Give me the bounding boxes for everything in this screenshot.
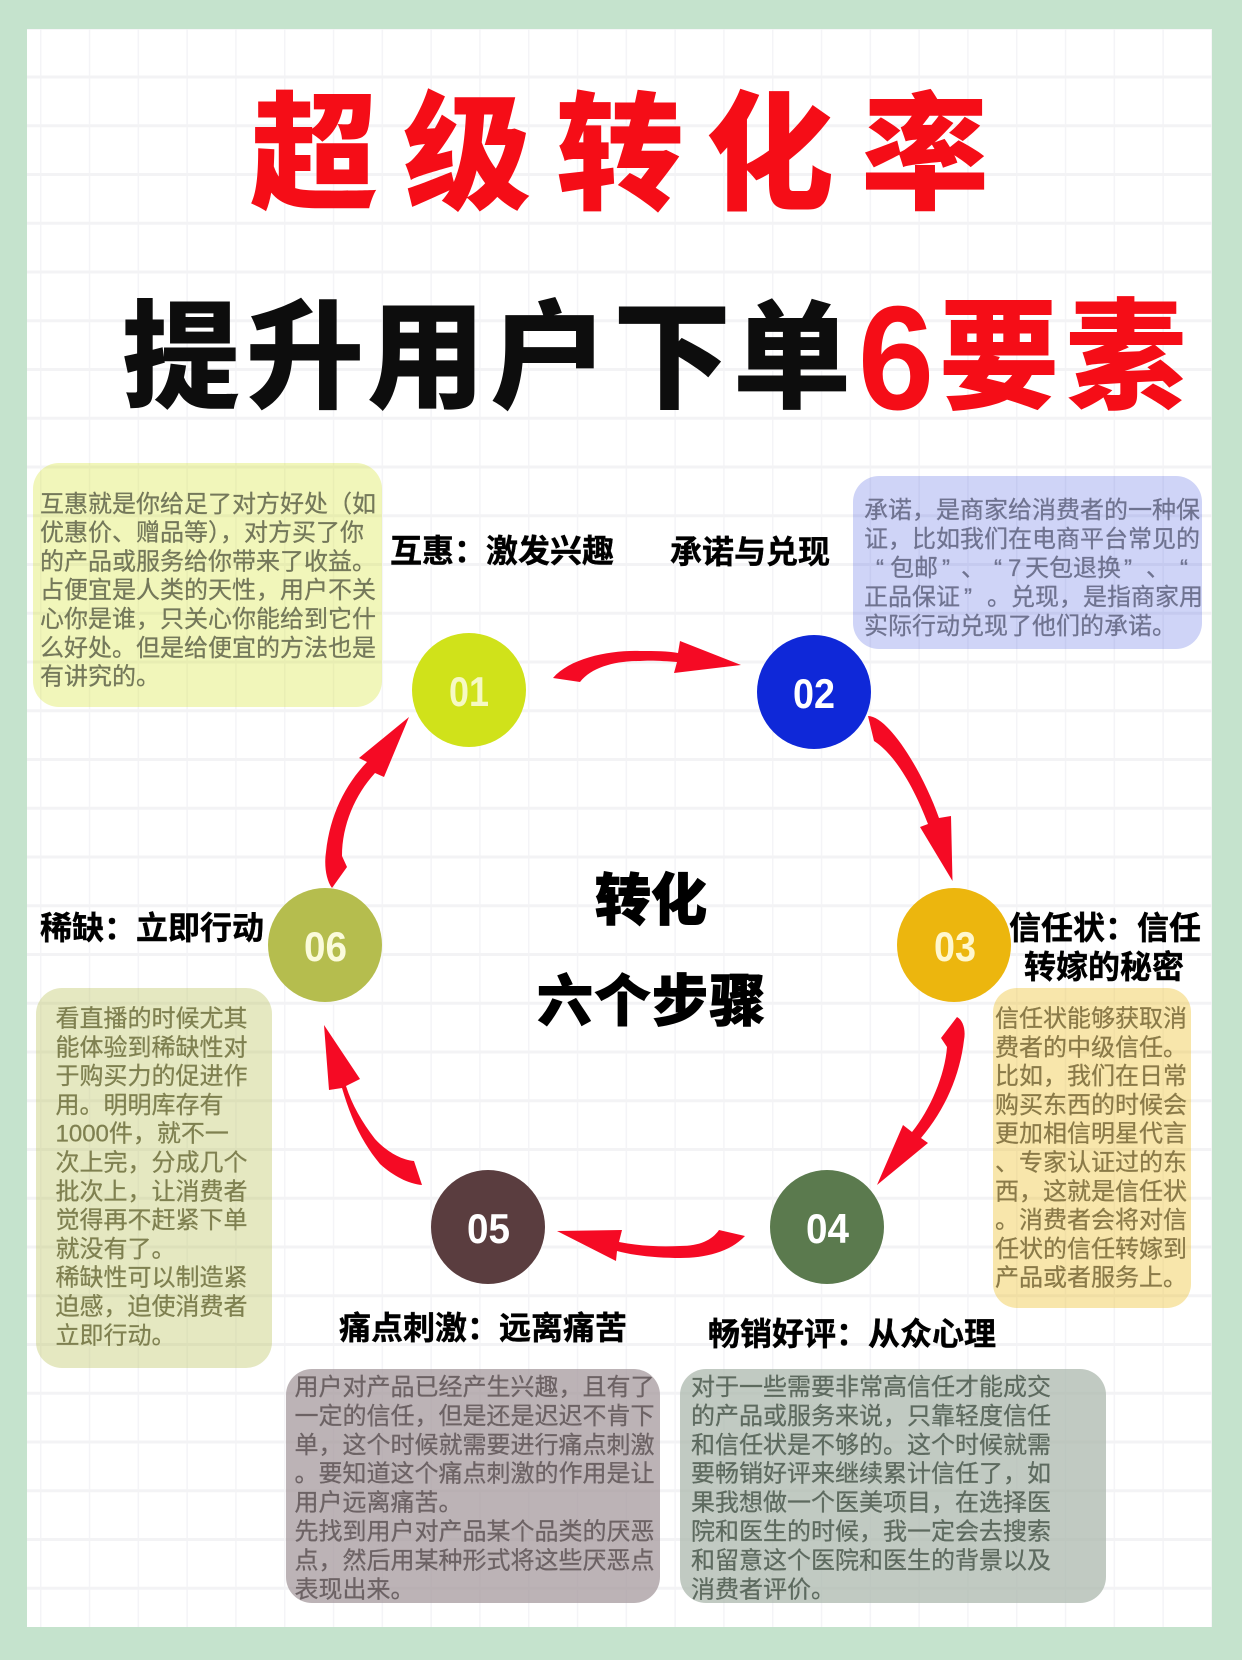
panel: 信任状 description: 购买东西的时候会 <box>995 1092 1187 1119</box>
panel: 痛点刺激 description: 表现出来。 <box>294 1576 414 1603</box>
panel: 痛点刺激 description: 用户远离痛苦。 <box>294 1490 462 1517</box>
panel: 承诺与兑现 description: 实际行动兑现了他们的承诺。 <box>864 613 1176 640</box>
arrow: 06 to 01 <box>325 717 409 888</box>
step circle 06 <box>268 888 382 1002</box>
panel: 稀缺 description: 于购买力的促进作 <box>56 1063 248 1090</box>
panel: 稀缺 description: 就没有了。 <box>56 1236 176 1263</box>
panel: 互惠 description: 有讲究的。 <box>40 664 160 691</box>
panel: 畅销好评 description: 院和医生的时候，我一定会去搜索 <box>691 1518 1051 1546</box>
panel: 畅销好评 description: 对于一些需要非常高信任才能成交 <box>691 1374 1051 1401</box>
panel: 互惠 description: 占便宜是人类的天性，用户不关 <box>40 577 376 604</box>
panel: 稀缺 description: 1000件，就不一 <box>56 1121 229 1148</box>
panel: 畅销好评 description: 消费者评价。 <box>691 1576 835 1603</box>
panel: 互惠 description <box>33 463 382 707</box>
panel: 承诺与兑现 description: 证，比如我们在电商平台常见的 <box>864 526 1200 553</box>
step circle 02 <box>757 635 871 749</box>
subtitle: 提升用户下单6要素: 要素 <box>939 291 1186 425</box>
step circle 03: 03 <box>934 923 976 970</box>
panel: 痛点刺激 description: 用户对产品已经产生兴趣，且有了 <box>294 1374 654 1401</box>
panel: 互惠 description: 心你是谁，只关心你能给到它什 <box>40 606 376 633</box>
panel: 信任状 description: 更加相信明星代言 <box>995 1121 1187 1148</box>
panel: 互惠 description: 互惠就是你给足了对方好处（如 <box>40 491 376 518</box>
center heading: 转化 六个步骤 <box>537 869 767 1033</box>
step circle 03 <box>897 888 1011 1002</box>
panel: 稀缺 description: 看直播的时候尤其 <box>56 1006 248 1032</box>
panel: 承诺与兑现 description <box>853 476 1203 649</box>
panel: 畅销好评 description: 要畅销好评来继续累计信任了，如 <box>691 1461 1051 1488</box>
step circle 01: 01 <box>449 668 489 715</box>
panel: 信任状 description: 比如，我们在日常 <box>995 1063 1187 1090</box>
panel: 信任状 description: 。消费者会将对信 <box>995 1207 1187 1234</box>
panel: 稀缺 description: 能体验到稀缺性对 <box>56 1034 248 1061</box>
panel: 稀缺 description: 次上完，分成几个 <box>56 1150 248 1176</box>
panel: 互惠 description: 的产品或服务给你带来了收益。 <box>40 548 376 575</box>
step circle 06: 06 <box>304 923 347 970</box>
panel: 痛点刺激 description: 点，然后用某种形式将这些厌恶点 <box>294 1547 654 1574</box>
panel: 承诺与兑现 description: 正品保证”。兑现，是指商家用 <box>864 584 1203 611</box>
panel: 信任状 description: 费者的中级信任。 <box>995 1034 1187 1061</box>
arrow: 04 to 05 <box>557 1230 745 1261</box>
panel: 稀缺 description <box>36 988 272 1368</box>
heading: 互惠：激发兴趣: 互惠：激发兴趣 <box>390 533 614 569</box>
panel: 信任状 description: 、专家认证过的东 <box>995 1150 1187 1176</box>
panel: 稀缺 description: 觉得再不赶紧下单 <box>56 1207 248 1234</box>
panel: 互惠 description: 么好处。但是给便宜的方法也是 <box>40 635 376 662</box>
title: 超级转化率: 超级转化率 <box>250 84 989 227</box>
subtitle: 提升用户下单6要素: 6 <box>858 276 934 441</box>
panel: 稀缺 description: 用。明明库存有 <box>56 1092 224 1119</box>
arrow: 03 to 04 <box>877 1017 965 1185</box>
heading: 承诺与兑现: 承诺与兑现 <box>670 534 830 570</box>
arrow: 02 to 03 <box>868 716 952 881</box>
heading: 信任状：信任转嫁的秘密 <box>1009 910 1201 985</box>
heading: 畅销好评：从众心理: 畅销好评：从众心理 <box>708 1316 996 1352</box>
panel: 痛点刺激 description: 先找到用户对产品某个品类的厌恶 <box>294 1518 654 1546</box>
panel: 信任状 description: 信任状能够获取消 <box>995 1006 1187 1032</box>
panel: 稀缺 description: 批次上，让消费者 <box>56 1178 248 1205</box>
panel: 互惠 description: 优惠价、赠品等），对方买了你 <box>40 520 364 547</box>
panel: 信任状 description: 任状的信任转嫁到 <box>995 1236 1187 1263</box>
panel: 畅销好评 description: 果我想做一个医美项目，在选择医 <box>691 1490 1051 1517</box>
panel: 稀缺 description: 迫感，迫使消费者 <box>56 1294 248 1320</box>
panel: 信任状 description <box>993 988 1191 1308</box>
panel: 痛点刺激 description <box>286 1369 660 1603</box>
panel: 稀缺 description: 立即行动。 <box>56 1322 176 1349</box>
panel: 畅销好评 description: 和信任状是不够的。这个时候就需 <box>691 1432 1051 1459</box>
panel: 痛点刺激 description: 一定的信任，但是还是迟迟不肯下 <box>294 1403 654 1430</box>
step circle 05 <box>431 1170 545 1284</box>
arrow: 05 to 06 <box>324 1025 422 1185</box>
step circle 04 <box>770 1170 884 1284</box>
panel: 稀缺 description: 稀缺性可以制造紧 <box>56 1265 248 1292</box>
panel: 信任状 description: 产品或者服务上。 <box>995 1265 1187 1292</box>
panel: 承诺与兑现 description: “包邮”、“7天包退换”、“ <box>876 555 1188 582</box>
center heading: 转化 六个步骤: 转化 <box>595 869 707 932</box>
subtitle: 提升用户下单6要素: 提升用户下单 <box>122 293 851 425</box>
heading: 信任状：信任转嫁的秘密: 转嫁的秘密 <box>1024 949 1184 985</box>
subtitle: 提升用户下单6要素 <box>122 276 1186 441</box>
panel: 畅销好评 description: 的产品或服务来说，只靠轻度信任 <box>691 1403 1051 1430</box>
panel: 痛点刺激 description: 单，这个时候就需要进行痛点刺激 <box>294 1432 654 1459</box>
panel: 信任状 description: 西，这就是信任状 <box>995 1178 1187 1205</box>
step circle 05: 05 <box>467 1205 510 1252</box>
step circle 02: 02 <box>793 670 835 717</box>
heading: 稀缺：立即行动: 稀缺：立即行动 <box>40 910 264 946</box>
panel: 畅销好评 description: 和留意这个医院和医生的背景以及 <box>691 1547 1051 1574</box>
step circle 01 <box>412 633 526 747</box>
heading: 信任状：信任转嫁的秘密: 信任状：信任 <box>1009 910 1201 946</box>
panel: 痛点刺激 description: 。要知道这个痛点刺激的作用是让 <box>294 1461 654 1488</box>
heading: 痛点刺激：远离痛苦: 痛点刺激：远离痛苦 <box>339 1310 627 1346</box>
panel: 承诺与兑现 description: 承诺，是商家给消费者的一种保 <box>864 497 1200 524</box>
arrow: 01 to 02 <box>553 641 741 682</box>
panel: 畅销好评 description <box>680 1369 1106 1603</box>
center heading: 转化 六个步骤: 六个步骤 <box>537 970 767 1033</box>
step circle 04: 04 <box>806 1205 850 1252</box>
